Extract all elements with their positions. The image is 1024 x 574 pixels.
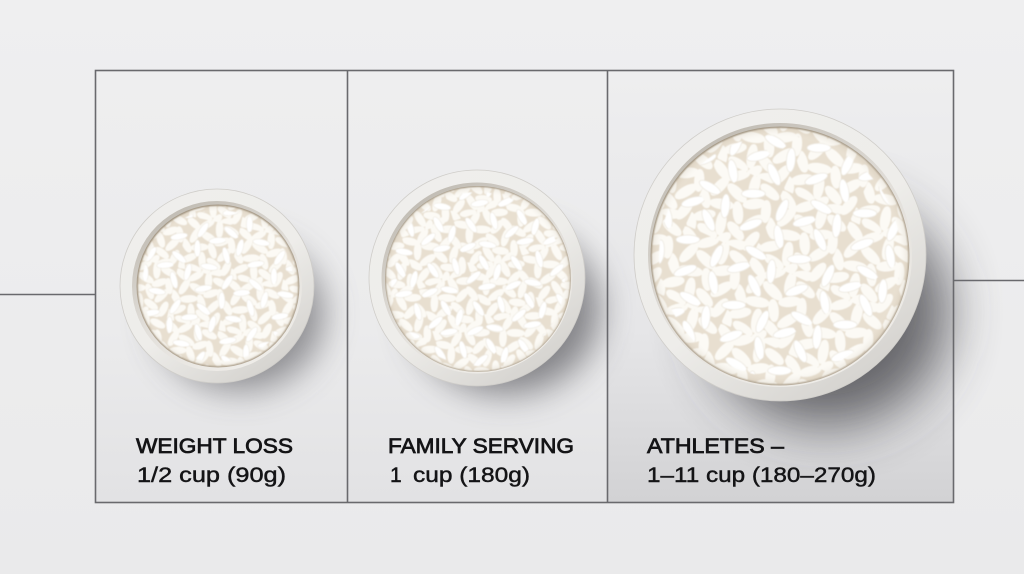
shadow: medium bowl <box>412 226 600 394</box>
panel: family serving bowl <box>369 170 585 386</box>
label: weight loss: WEIGHT LOSS <box>136 435 293 458</box>
panel fill: weight loss <box>96 71 347 502</box>
label: family serving <box>388 435 574 487</box>
panel fill: family serving <box>348 71 607 502</box>
shadow: large bowl <box>704 198 948 426</box>
label: athletes <box>647 435 876 487</box>
panel fill: athletes <box>608 71 953 502</box>
label: weight loss: 1/2 cup (90g) <box>137 464 286 487</box>
shadow: small bowl <box>156 238 324 390</box>
label: athletes: 1–11 cup (180–270g) <box>647 464 876 487</box>
label: weight loss <box>136 435 293 487</box>
label: family serving: 1 <box>390 464 402 487</box>
panel: athletes bowl <box>634 109 926 401</box>
label: family serving: cup (180g) <box>413 464 530 487</box>
comparison frame <box>0 70 1024 503</box>
label: family serving: FAMILY SERVING <box>388 435 574 458</box>
panel: weight loss bowl <box>120 189 314 383</box>
label: athletes: ATHLETES – <box>647 435 784 458</box>
